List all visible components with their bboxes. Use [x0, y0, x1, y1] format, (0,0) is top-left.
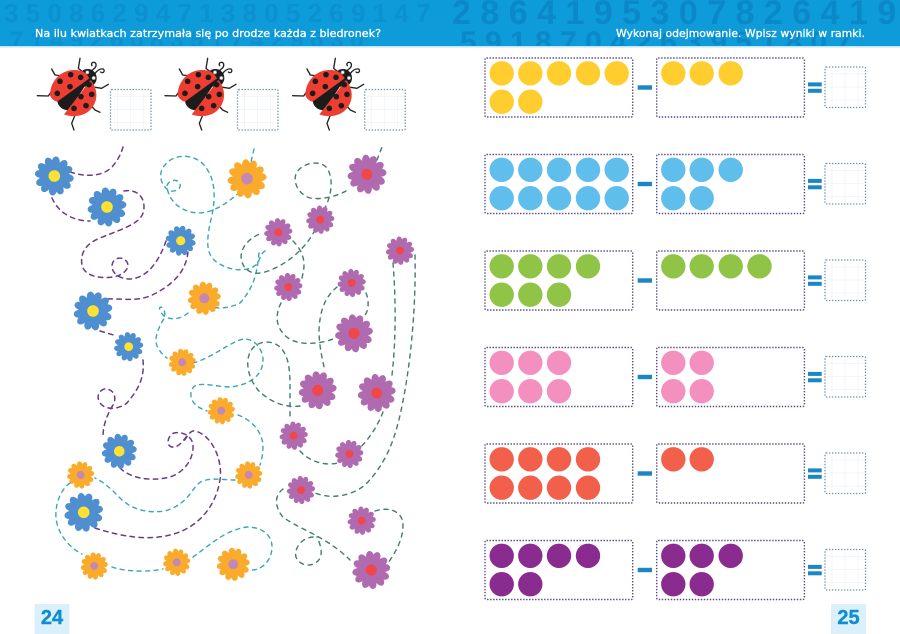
subtraction row 6: purple 6 - 5	[485, 540, 866, 600]
subtraction row 5: red 8 - 2	[485, 444, 866, 503]
page number 25: 25	[837, 607, 860, 629]
subtraction row 1: yellow 7 - 3	[485, 58, 866, 117]
header band	[0, 0, 900, 59]
ladybug 2 with answer box	[165, 58, 278, 130]
heading: right page: Wykonaj odejmowanie. Wpisz wyniki w ramki.	[616, 28, 865, 40]
ladybug 3 with answer box	[293, 58, 405, 130]
ladybug 1 with answer box	[37, 58, 151, 130]
page number 25	[831, 604, 866, 634]
heading: left page: Na ilu kwiatkach zatrzymała się po drodze każda z biedronek?	[35, 28, 381, 40]
header band: 7 1 4 9 2 6 0 8 3 5 1 7 4 2 9 6 3 0	[10, 27, 364, 54]
flowers: blue	[32, 154, 198, 533]
header band: 5 9 1 8 7 0 4 2 6 3 9 5 1 8 0 7	[460, 26, 852, 59]
subtraction row 3: green 7 - 4	[485, 251, 866, 310]
subtraction row 4: pink 6 - 4	[485, 348, 866, 406]
flowers: orange	[65, 156, 270, 583]
green paths	[241, 147, 415, 565]
flowers: purple	[261, 152, 417, 591]
purple paths	[52, 147, 220, 538]
teal paths	[56, 149, 272, 571]
subtraction row 2: blue 10 - 5	[485, 154, 866, 214]
page number 24	[34, 604, 70, 634]
page number 24: 24	[41, 607, 64, 629]
maze: dashed paths	[52, 147, 415, 571]
